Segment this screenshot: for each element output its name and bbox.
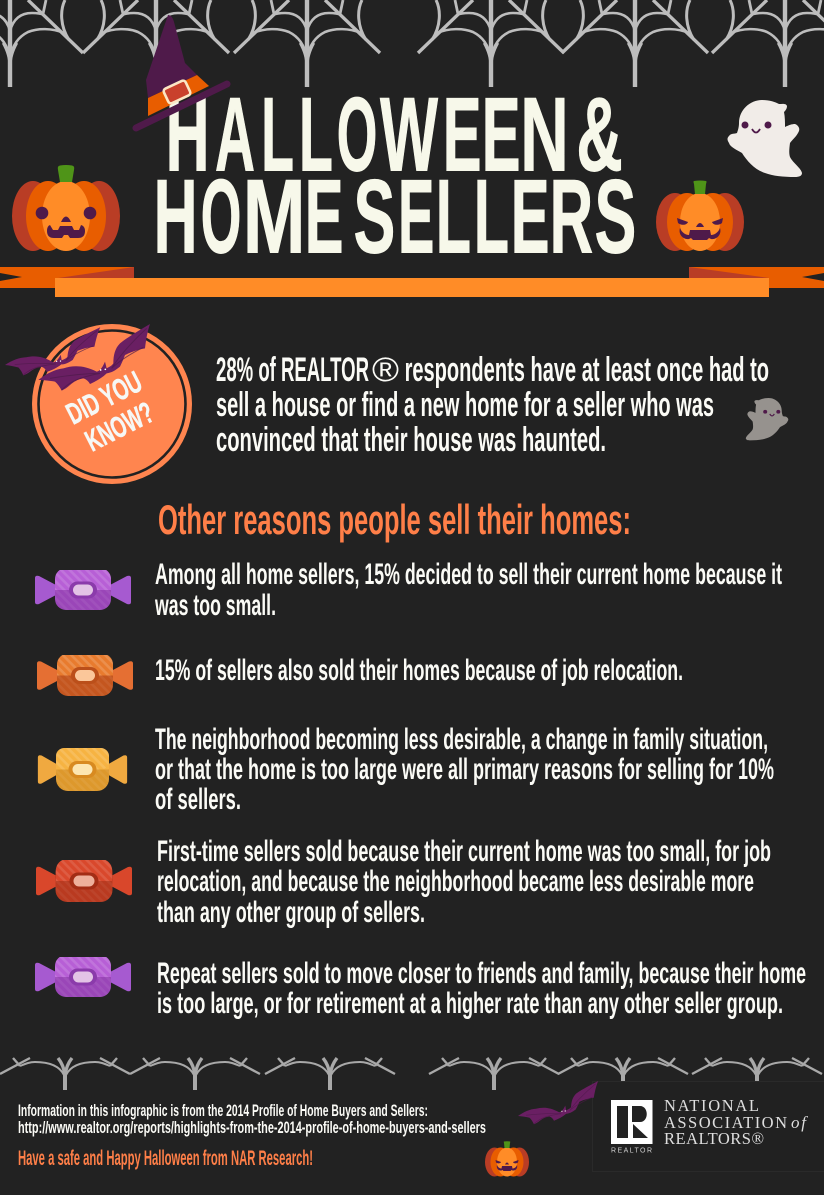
item text: first-time sellers: than any other group of sellers. [157,896,425,929]
title: M [243,158,306,276]
title: & [576,76,623,194]
title: L [261,76,294,194]
did you know text: ® [372,351,399,389]
candy icon: yellow [38,748,127,791]
candy icon: violet [35,957,131,997]
title: L [474,158,509,276]
title: S [594,158,636,276]
item text: neighborhood: of sellers. [155,783,241,816]
title: S [354,158,395,276]
title: W [380,76,438,194]
item text: too small [154,558,782,622]
closing greeting: Have a safe and Happy Halloween from NAR Research! [18,1147,313,1170]
association name: NATIONAL [664,1096,759,1115]
title: O [201,158,241,276]
title: L [299,76,333,194]
item text: neighborhood [155,723,774,816]
association name: REALTORS® [664,1129,764,1148]
spider webs top [0,0,824,87]
title: A [215,76,255,194]
association name: ASSOCIATION [664,1113,787,1132]
source text: http://www.realtor.org/reports/highlights-from-the-2014-profile-of-home-buyers-and-sellers [18,1118,486,1137]
icon: ghost large [728,100,802,177]
realtor logo mark: REALTOR [611,1148,652,1154]
title: O [337,76,377,194]
did you know text: 28% of REALTOR [216,351,369,389]
icon: pumpkin right [656,180,744,251]
source text: Information in this infographic is from the 2014 Profile of Home Buyers and Sellers: [18,1101,428,1120]
candy icon: orange [37,655,133,696]
realtor logo mark [611,1100,652,1154]
icon: pumpkin left [12,165,120,251]
icon: ghost small [746,398,788,440]
title: E [305,158,344,276]
title: R [550,158,593,276]
title: E [511,158,550,276]
did you know badge [32,324,192,484]
item text: too small: was too small. [154,589,276,622]
source text [18,1101,486,1137]
icon: bats on badge [4,319,150,391]
icon: bat footer [518,1077,598,1128]
ribbon banner [0,267,824,297]
icon: pumpkin footer [485,1141,529,1176]
title [154,76,636,276]
item text: repeat sellers [157,957,806,1020]
did you know text [216,351,769,459]
title: E [443,76,482,194]
association name: of [791,1113,808,1132]
candy icon: red [36,860,132,902]
title: N [520,76,569,194]
title: H [154,158,198,276]
icon: witch hat [136,15,227,128]
title: H [166,76,210,194]
candy icon: purple [35,570,131,610]
title: E [398,158,434,276]
item text: first-time sellers [157,835,771,929]
association name [664,1096,808,1148]
logo panel [592,1082,824,1172]
title: E [482,76,521,194]
title: L [436,158,471,276]
did you know badge: KNOW? [80,396,159,458]
spider webs footer [0,1058,822,1090]
did you know badge: DID YOU [61,366,147,431]
